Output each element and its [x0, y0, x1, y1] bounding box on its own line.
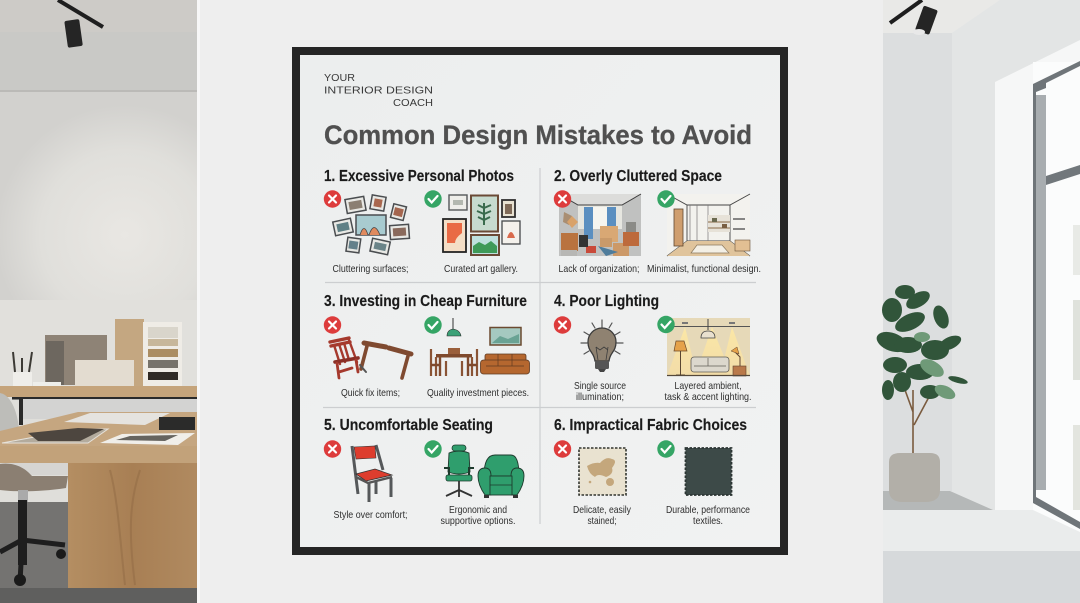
- wall behind poster: [197, 0, 883, 603]
- grid dividers: [323, 168, 756, 524]
- icon: red stylish chair: [352, 445, 392, 502]
- icon: check: [657, 190, 675, 208]
- panel: 2 overly cluttered space: [554, 168, 761, 275]
- caption right: [440, 504, 516, 527]
- panel: 4 poor lighting: [554, 293, 752, 403]
- logo: Your Interior Design Coach: INTERIOR DESIGN: [324, 86, 433, 96]
- caption right: Ergonomic and: [449, 504, 507, 516]
- heading 2: 2. Overly Cluttered Space: [554, 168, 722, 185]
- icon: cross: [324, 440, 341, 458]
- desk: [0, 412, 197, 603]
- caption right: Layered ambient,: [674, 380, 742, 392]
- icon: durable fabric swatch: [686, 448, 732, 495]
- heading 1: 1. Excessive Personal Photos: [324, 168, 514, 185]
- plant: [874, 285, 968, 502]
- heading 5: 5. Uncomfortable Seating: [324, 417, 493, 434]
- icon: ergonomic office chair: [444, 445, 474, 497]
- caption left: Delicate, easily: [573, 504, 632, 516]
- icon: check: [657, 316, 675, 333]
- caption left: Lack of organization;: [558, 263, 640, 275]
- icon: check: [657, 440, 675, 458]
- heading 6: 6. Impractical Fabric Choices: [554, 417, 747, 434]
- icon: cross: [554, 440, 571, 458]
- office chair: [0, 464, 68, 586]
- scene: left office background: [0, 0, 197, 603]
- caption right: task & accent lighting.: [664, 391, 752, 403]
- caption right: supportive options.: [440, 515, 516, 527]
- caption left: Cluttering surfaces;: [332, 263, 408, 275]
- caption right: Curated art gallery.: [444, 263, 518, 275]
- logo: Your Interior Design Coach: YOUR: [324, 73, 355, 84]
- panel: 1 excessive personal photos: [324, 168, 520, 275]
- material samples on shelf: [13, 319, 182, 387]
- icon: check: [424, 190, 442, 208]
- panel: 5 uncomfortable seating: [324, 417, 524, 527]
- icon: cross: [324, 190, 341, 208]
- caption left: Style over comfort;: [334, 509, 408, 521]
- caption right: Durable, performance: [666, 504, 750, 516]
- icon: minimalist room: [667, 194, 750, 256]
- panel: 3 investing in cheap furniture: [324, 293, 530, 399]
- icon: track spotlight left: [58, 0, 103, 48]
- icon: cross: [554, 316, 571, 334]
- logo: Your Interior Design Coach: [324, 73, 433, 109]
- icon: check: [424, 440, 442, 458]
- title: Common Design Mistakes to Avoid: [324, 120, 752, 150]
- shelf: [0, 386, 197, 425]
- scene: right room background: [874, 0, 1080, 603]
- icon: curated gallery: [443, 195, 520, 255]
- caption right: textiles.: [693, 515, 723, 527]
- icon: stained fabric swatch: [579, 448, 626, 495]
- icon: layered lighting room: [667, 318, 750, 376]
- icon: track spotlight right: [890, 0, 938, 35]
- icon: check: [424, 316, 442, 334]
- caption left: stained;: [588, 515, 616, 527]
- icon: cross: [554, 190, 571, 208]
- heading 3: 3. Investing in Cheap Furniture: [324, 293, 527, 310]
- heading 4: 4. Poor Lighting: [554, 293, 659, 310]
- icon: cluttered room: [559, 194, 641, 256]
- chair back: [0, 393, 19, 432]
- caption left: Quick fix items;: [341, 387, 400, 399]
- caption left: [573, 504, 632, 527]
- caption right: Quality investment pieces.: [427, 387, 529, 399]
- icon: cross: [324, 316, 341, 334]
- logo: Your Interior Design Coach: COACH: [393, 98, 433, 109]
- icon: green armchair: [478, 455, 524, 498]
- caption left: illumination;: [576, 391, 624, 403]
- caption right: [666, 504, 750, 527]
- panel: 6 impractical fabric choices: [554, 417, 750, 527]
- caption left: Single source: [574, 380, 626, 392]
- icon: broken chair and table: [330, 338, 411, 378]
- caption left: [574, 380, 626, 403]
- poster frame: [292, 47, 788, 555]
- wall edge highlight: [197, 0, 200, 603]
- caption right: [664, 380, 752, 403]
- icon: scattered photos: [333, 195, 409, 255]
- poster surface: [300, 55, 780, 547]
- icon: single light bulb: [581, 320, 623, 372]
- icon: dining set, pendant, picture, sofa: [431, 318, 530, 376]
- caption right: Minimalist, functional design.: [647, 263, 761, 275]
